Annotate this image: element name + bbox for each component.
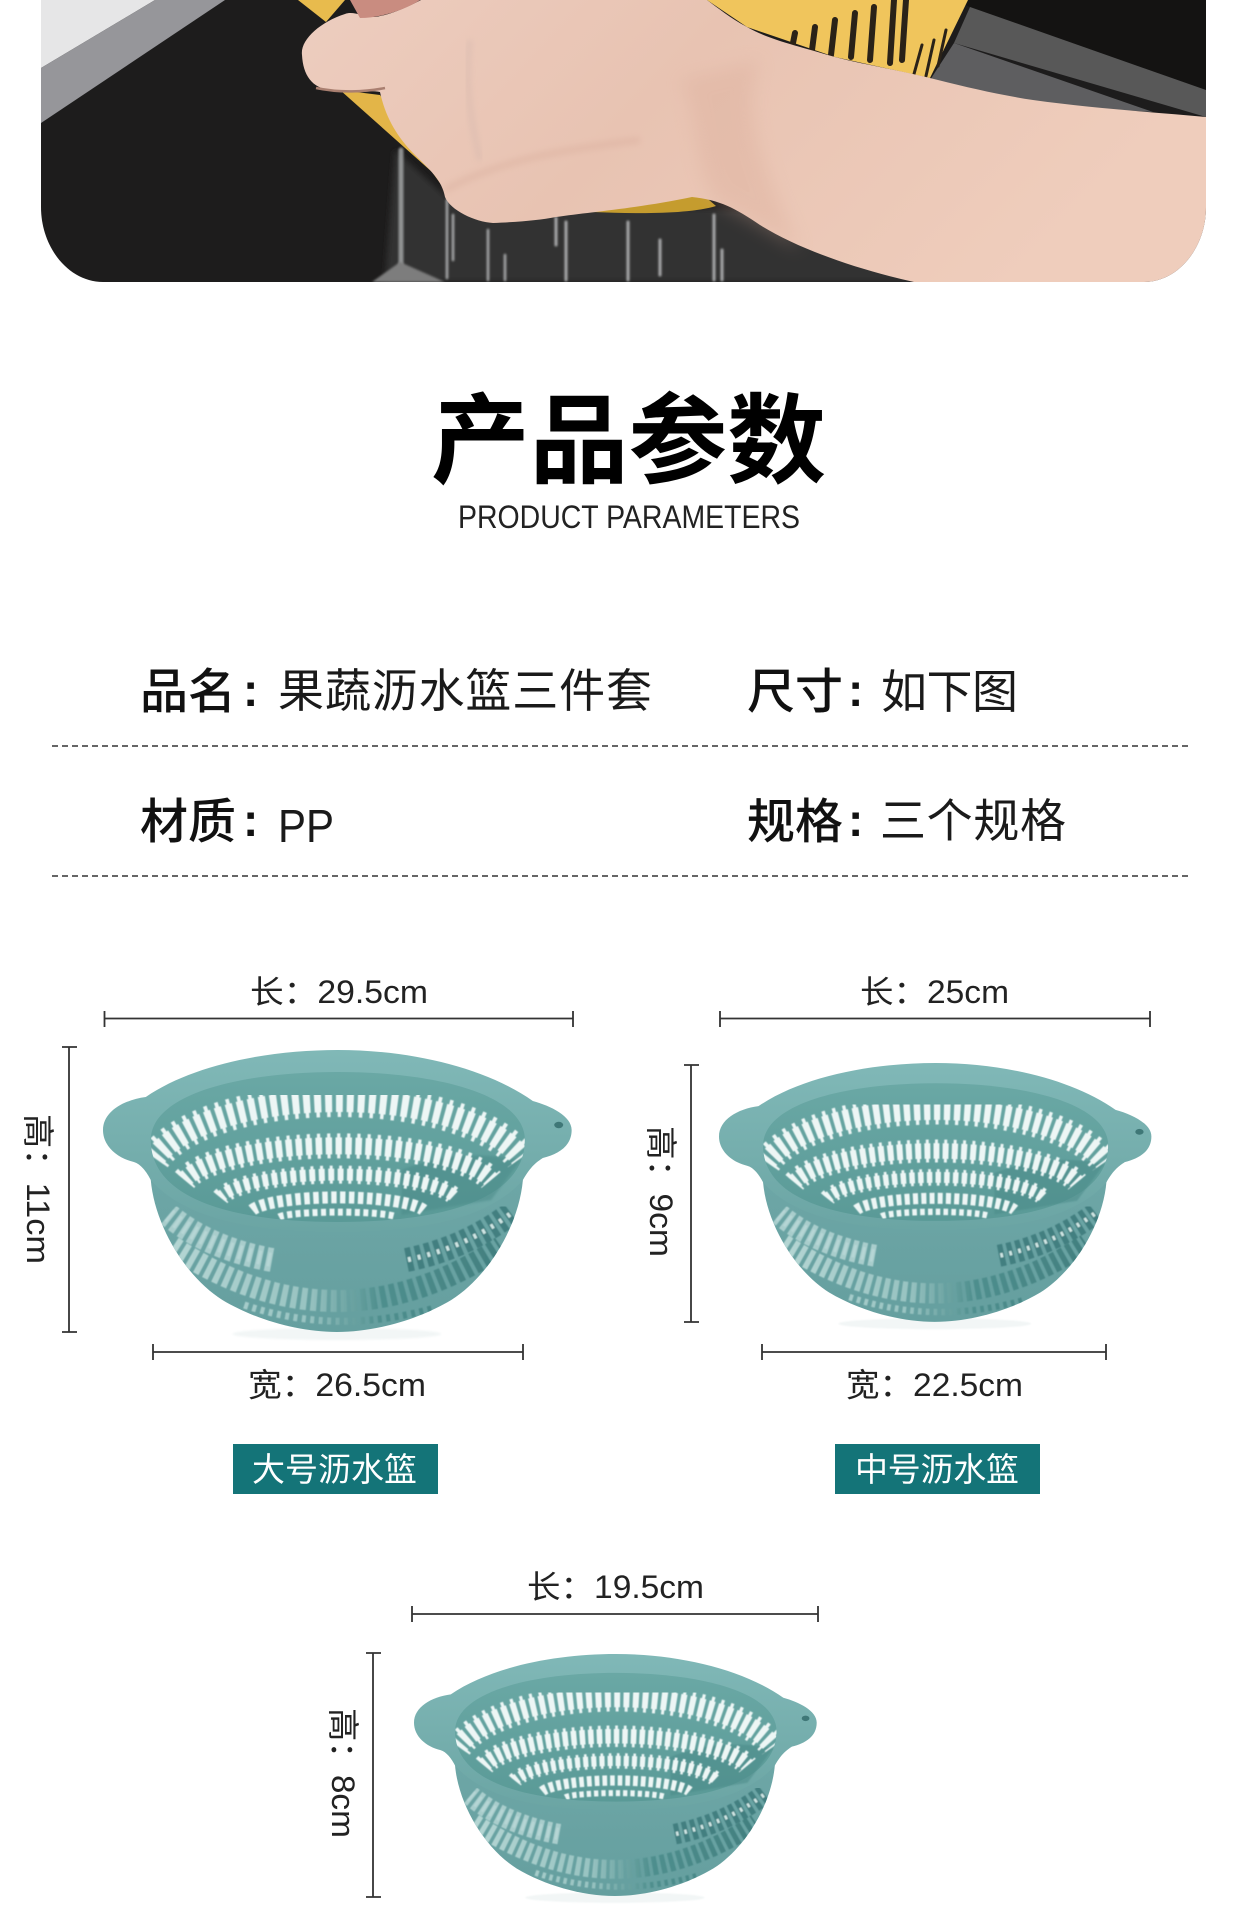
panel: large colander	[20, 974, 573, 1494]
row: specification: 三个规格	[880, 795, 1066, 847]
length label: 长：19.5cm	[527, 1569, 704, 1605]
row: size: 尺寸	[747, 666, 843, 719]
height label: 高：11cm	[20, 1114, 56, 1264]
panel: small colander	[325, 1569, 818, 1903]
length dimension line	[412, 1606, 818, 1622]
width label: 宽：26.5cm	[248, 1367, 426, 1403]
row: material: :	[243, 794, 258, 846]
row: size: 如下图	[881, 666, 1018, 718]
water streams	[401, 150, 722, 280]
row: material	[140, 794, 334, 852]
row: specification: :	[848, 794, 863, 846]
height label: 高：8cm	[325, 1708, 361, 1838]
row: size	[747, 664, 1018, 719]
hand and arm	[302, 0, 1206, 282]
row: material: PP	[278, 800, 334, 852]
height dimension line	[62, 1047, 77, 1332]
length dimension line	[720, 1011, 1150, 1027]
subtitle: PRODUCT PARAMETERS	[458, 499, 800, 535]
yellow colander	[298, 0, 345, 22]
photo: hand draining the yellow colander in a sink	[41, 0, 1206, 282]
size tag: 中号沥水篮	[855, 1451, 1019, 1488]
row: material: 材质	[140, 796, 236, 849]
width dimension line	[153, 1344, 523, 1360]
width label: 宽：22.5cm	[846, 1367, 1023, 1403]
size tag	[233, 1444, 438, 1494]
row: specification: 规格	[747, 796, 843, 849]
icon: large colander	[103, 1050, 572, 1340]
icon: medium colander	[719, 1063, 1151, 1329]
height label: 高：9cm	[643, 1126, 679, 1257]
row: product name	[140, 664, 652, 719]
size tag	[835, 1444, 1040, 1494]
panel: medium colander	[643, 974, 1151, 1494]
row: product name: 品名	[140, 666, 236, 719]
height dimension line	[684, 1065, 699, 1322]
row: specification	[747, 794, 1066, 849]
height dimension line	[366, 1653, 381, 1897]
row: size: :	[848, 664, 863, 716]
width dimension line	[762, 1344, 1106, 1360]
icon: small colander	[414, 1654, 817, 1903]
size tag: 大号沥水篮	[252, 1451, 417, 1488]
length label: 长：29.5cm	[250, 974, 428, 1010]
row: product name: 果蔬沥水篮三件套	[278, 665, 652, 717]
length label: 长：25cm	[860, 974, 1009, 1010]
parameter table	[52, 664, 1190, 876]
length dimension line	[104, 1011, 573, 1027]
title: 产品参数	[431, 386, 826, 496]
row: product name: :	[243, 664, 258, 716]
